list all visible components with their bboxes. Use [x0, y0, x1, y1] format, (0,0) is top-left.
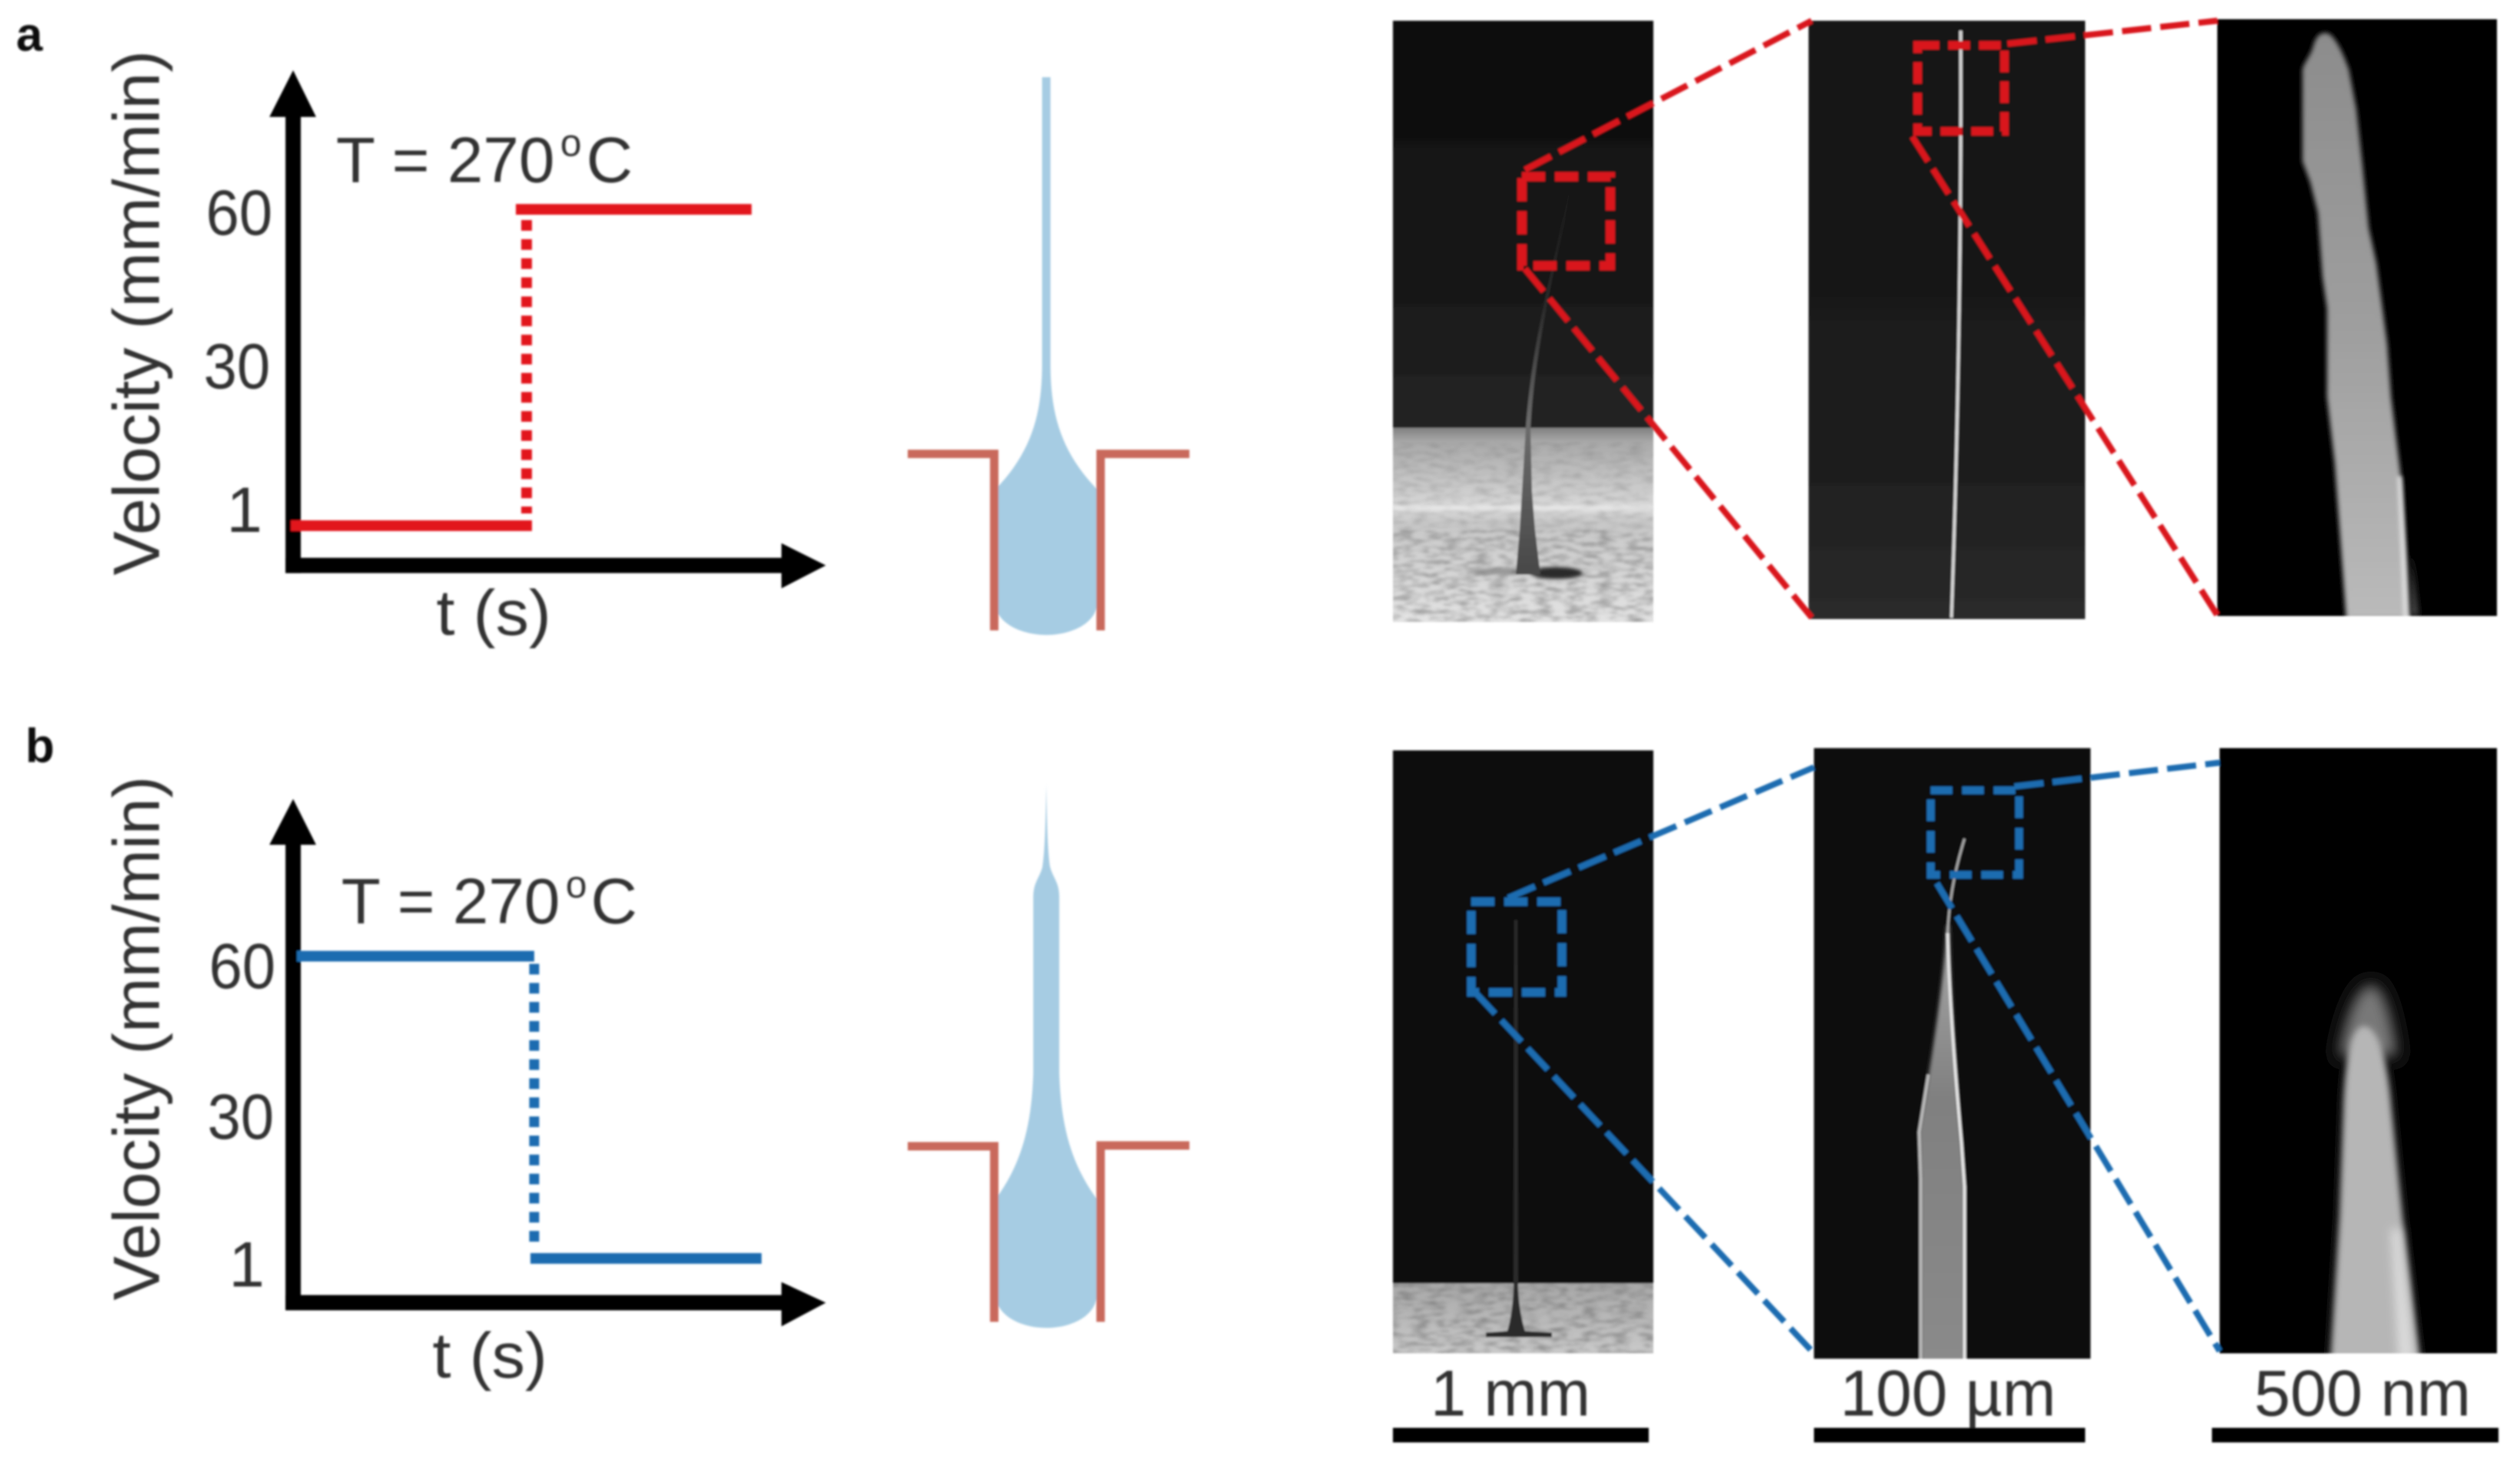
- temperature label: o: [565, 863, 587, 906]
- well walls: [907, 454, 1189, 631]
- temperature label: T = 270: [341, 865, 560, 937]
- panel b: micrograph 1 mm: [1393, 750, 1653, 1353]
- blue velocity step line: [297, 951, 761, 1263]
- polymer droplet: [996, 77, 1097, 635]
- panel a: micrograph 100 um: [1809, 21, 2085, 619]
- panel a: drawing of fibre pulled from well: [907, 77, 1189, 635]
- connector lines: [1475, 763, 2220, 1353]
- x axis label: t (s): [436, 577, 551, 649]
- panel b: micrograph 100 um: [1814, 748, 2091, 1363]
- zoom box on 100 um image: [1931, 790, 2019, 875]
- scale bar 100 um: 100 µm: [1840, 1357, 2056, 1429]
- scale bar 1 mm: [1393, 1357, 1649, 1442]
- zoom box on 1 mm image: [1522, 177, 1610, 266]
- tick 60: 60: [206, 176, 273, 248]
- scale bar 1 mm: 1 mm: [1431, 1357, 1590, 1429]
- panel b: drawing of fibre pulled from well: [907, 784, 1189, 1328]
- panel a: micrograph 1 mm: [1393, 21, 1653, 622]
- y axis arrow: [270, 799, 316, 1310]
- connector lines: [1525, 21, 2217, 618]
- polymer droplet: [996, 784, 1097, 1328]
- zoom box on 100 um image: [1918, 45, 2004, 131]
- tick 1: 1: [229, 1228, 264, 1300]
- temperature label: C: [586, 124, 633, 196]
- panel b: velocity chart: [101, 776, 826, 1391]
- tick 30: 30: [204, 329, 270, 402]
- x axis arrow: [286, 543, 826, 588]
- panel label b: b: [25, 720, 55, 773]
- tick 1: 1: [227, 473, 262, 545]
- well walls: [907, 1145, 1189, 1322]
- zoom box on 1 mm image: [1471, 902, 1562, 992]
- red velocity step line: [291, 204, 751, 531]
- tick 60: 60: [209, 930, 276, 1002]
- y axis arrow: [270, 71, 316, 573]
- panel a: red zoom callouts: [1522, 21, 2217, 618]
- x axis arrow: [286, 1282, 826, 1326]
- panel a: velocity chart: [100, 51, 826, 649]
- x axis label: t (s): [433, 1320, 547, 1391]
- scale bar 500 nm: [2212, 1357, 2498, 1442]
- y axis label: Velocity (mm/min): [100, 51, 174, 575]
- panel label a: a: [16, 8, 43, 61]
- panel b: blue zoom callouts: [1471, 763, 2220, 1353]
- temperature label: T = 270: [336, 124, 555, 196]
- temperature label: C: [591, 865, 638, 937]
- scale bar 100 um: [1814, 1357, 2085, 1442]
- scale bar 500 nm: 500 nm: [2254, 1357, 2471, 1429]
- tick 30: 30: [207, 1081, 274, 1152]
- panel b: micrograph 500 nm: [2220, 748, 2497, 1363]
- temperature label: o: [560, 121, 582, 164]
- panel a: micrograph 500 nm: [2217, 19, 2497, 619]
- y axis label: Velocity (mm/min): [101, 776, 174, 1300]
